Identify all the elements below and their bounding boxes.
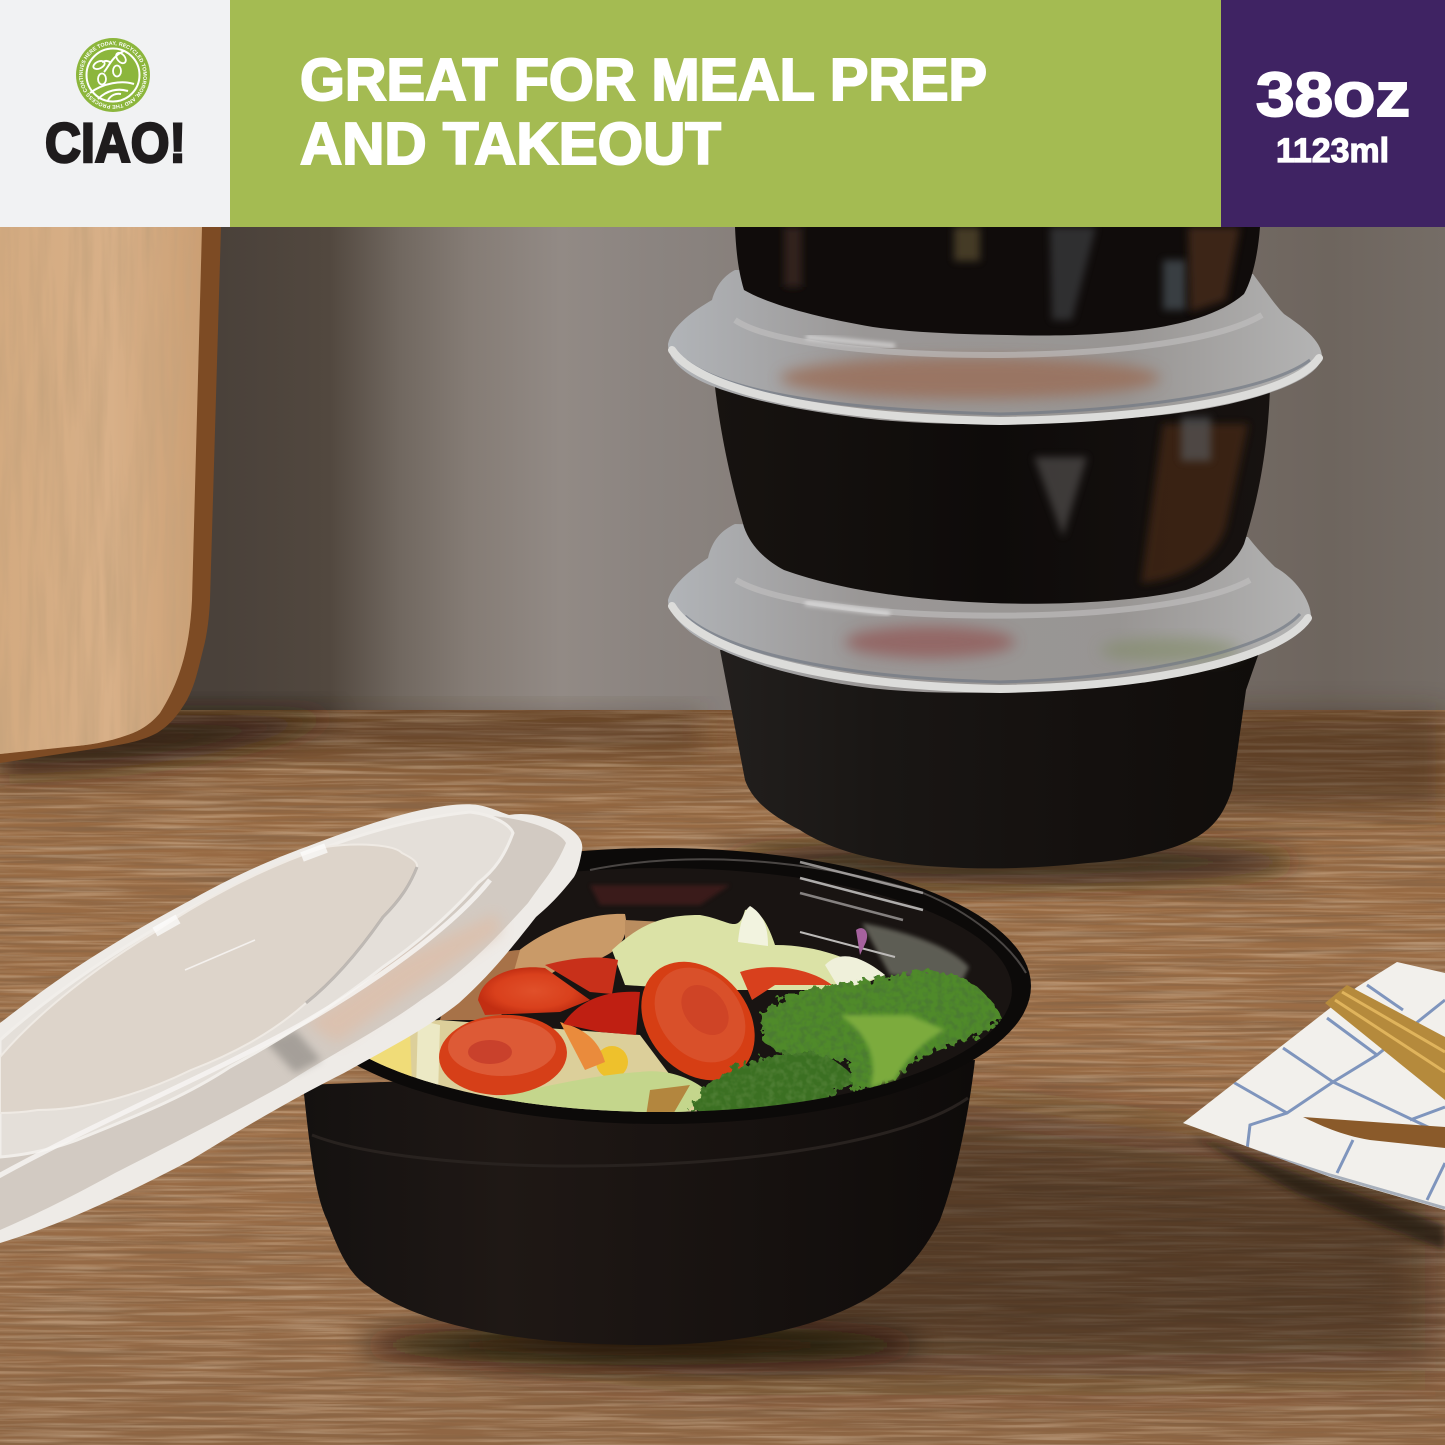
front container with salad (289, 848, 1031, 1345)
headline (300, 47, 987, 177)
header panel: capacity (1221, 0, 1445, 227)
left salad (370, 1020, 698, 1112)
headline: AND TAKEOUT (300, 111, 721, 177)
headline: GREAT FOR MEAL PREP (300, 47, 987, 113)
capacity in millilitres: 1123ml (1276, 132, 1389, 170)
wall background (0, 227, 1445, 727)
chicken (514, 914, 626, 973)
wooden table (0, 710, 1445, 1445)
bottom lid (668, 524, 1311, 693)
bottom container (720, 650, 1260, 868)
stacked containers (668, 227, 1322, 884)
top container (735, 227, 1260, 335)
front container shadow (360, 1100, 1445, 1375)
small tomato slice (437, 1012, 569, 1098)
bowl rim (289, 848, 1031, 1124)
middle container (715, 387, 1270, 604)
tomatoes (478, 967, 590, 1015)
fork handle (1325, 985, 1445, 1100)
salad (369, 906, 1002, 1112)
middle lid (668, 270, 1322, 424)
broccoli (690, 971, 1002, 1116)
capacity in ounces: 38oz (1256, 61, 1410, 130)
brand name: CIAO! (45, 111, 186, 174)
icon: recycled badge: HERE TODAY, RECYCLED TOMORROW, AND THE PROCESS CONTINUES (79, 41, 147, 109)
cutting board (0, 227, 340, 775)
transparent lid (0, 804, 582, 1245)
knife (1303, 1117, 1445, 1148)
header panel: headline (230, 0, 1221, 227)
lettuce back (612, 909, 885, 990)
lettuce front (494, 1071, 706, 1112)
bowl body (303, 1060, 975, 1345)
napkin with utensils (1183, 962, 1445, 1250)
large tomato slice (641, 962, 755, 1080)
header panel: logo (0, 0, 230, 227)
